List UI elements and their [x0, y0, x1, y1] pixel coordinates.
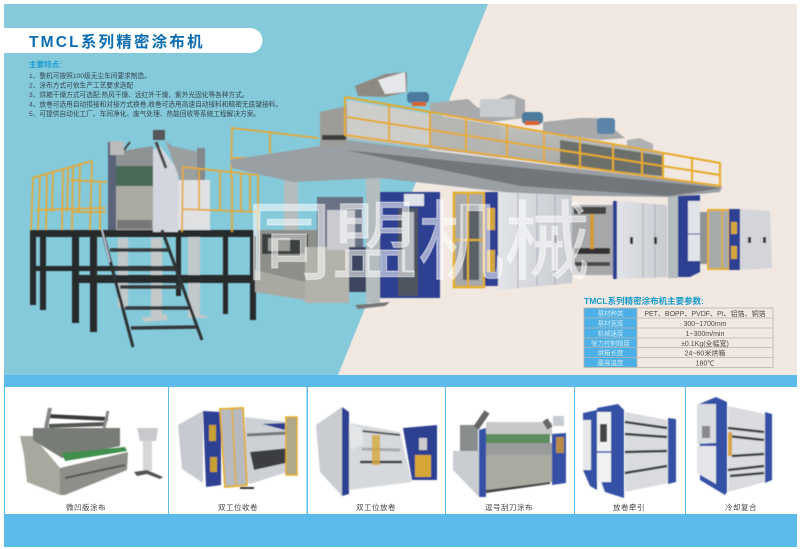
thumbnail: double station unwind	[316, 407, 437, 512]
left platform steel frame	[30, 230, 256, 332]
text block: main features: 2、涂布方式可依生产工艺要求选配	[29, 80, 133, 90]
parameter table: 烘箱长度	[598, 348, 624, 357]
label: 双工位收卷	[218, 502, 258, 512]
white cabinet	[498, 192, 572, 290]
center roller section	[572, 205, 613, 275]
left railings	[31, 128, 318, 232]
text block: main features: 5、可提供自动化工厂、车间净化、废气处理、热能回收等系统工程解决方案。	[29, 109, 260, 118]
label: 双工位放卷	[356, 502, 396, 512]
yellow guard frame	[453, 192, 485, 287]
parameter table: 300~1700mm	[683, 321, 727, 328]
parameter table	[584, 296, 773, 368]
text block: main features	[29, 59, 282, 118]
parameter table: 张力控制精度	[591, 338, 630, 348]
parameter table: 180℃	[696, 359, 714, 367]
thumbnail: unwind traction	[583, 404, 676, 512]
text block: main features: 3、烘箱干燥方式可选配:热风干燥、远红外干燥、紫外光固化等各种方式。	[29, 90, 249, 99]
upper steel deck	[230, 140, 722, 197]
left platform support pillars	[118, 236, 208, 322]
parameter table: 基材宽度	[598, 318, 624, 328]
background: blue left panel	[4, 4, 797, 375]
navy panel	[485, 192, 498, 286]
watermark: 同盟机械	[246, 172, 590, 297]
parameter table: 1~300m/min	[686, 331, 724, 338]
thumbnail panels	[5, 387, 797, 514]
label: 微凹版涂布	[66, 502, 106, 512]
background: beige diagonal panel	[338, 4, 797, 375]
oven dryers	[320, 72, 663, 177]
text block: main features: 主要特点:	[29, 59, 62, 69]
upper yellow railing	[345, 97, 720, 187]
right navy unit	[678, 195, 708, 277]
parameter table: 机械速度	[598, 328, 624, 338]
thumbnail: micro gravure coating	[20, 408, 163, 512]
parameter table: TMCL系列精密涂布机主要参数:	[584, 296, 704, 306]
blue band	[4, 375, 797, 547]
left roller unit	[255, 197, 366, 303]
parameter table: 基材种类	[598, 308, 624, 318]
thumbnail: double station rewind	[178, 408, 297, 512]
text block: main features: 4、放卷可选用自动搭接和对接方式换卷,收卷可选用高速自动接料和精密无底皱接料。	[29, 100, 282, 108]
title banner	[4, 28, 262, 53]
main coating line machine	[30, 72, 772, 347]
title banner: TMCL系列精密涂布机	[29, 32, 205, 51]
staircase	[102, 230, 202, 347]
right yellow guard and cabinet	[708, 209, 772, 270]
label: 放卷牵引	[613, 502, 645, 512]
left unit coating head	[108, 130, 210, 232]
parameter table: PET、BOPP、PVDF、PI、铝箔、铜箔	[644, 309, 766, 318]
text block: main features: 1、整机可按照100级无尘车间要求制造。	[29, 71, 151, 80]
label: 冷却复合	[725, 502, 757, 512]
thumbnail: comma knife coating	[453, 412, 566, 512]
parameter table: 最高温度	[598, 358, 624, 367]
parameter table: 24~60米烘箱	[685, 348, 725, 357]
label: 逗号刮刀涂布	[485, 502, 533, 512]
navy coating unit	[380, 192, 440, 298]
thumbnail: cooling lamination	[697, 397, 772, 512]
second white cabinet	[613, 201, 667, 279]
parameter table: ±0.1Kg(全幅宽)	[681, 339, 729, 348]
support columns	[284, 172, 678, 303]
